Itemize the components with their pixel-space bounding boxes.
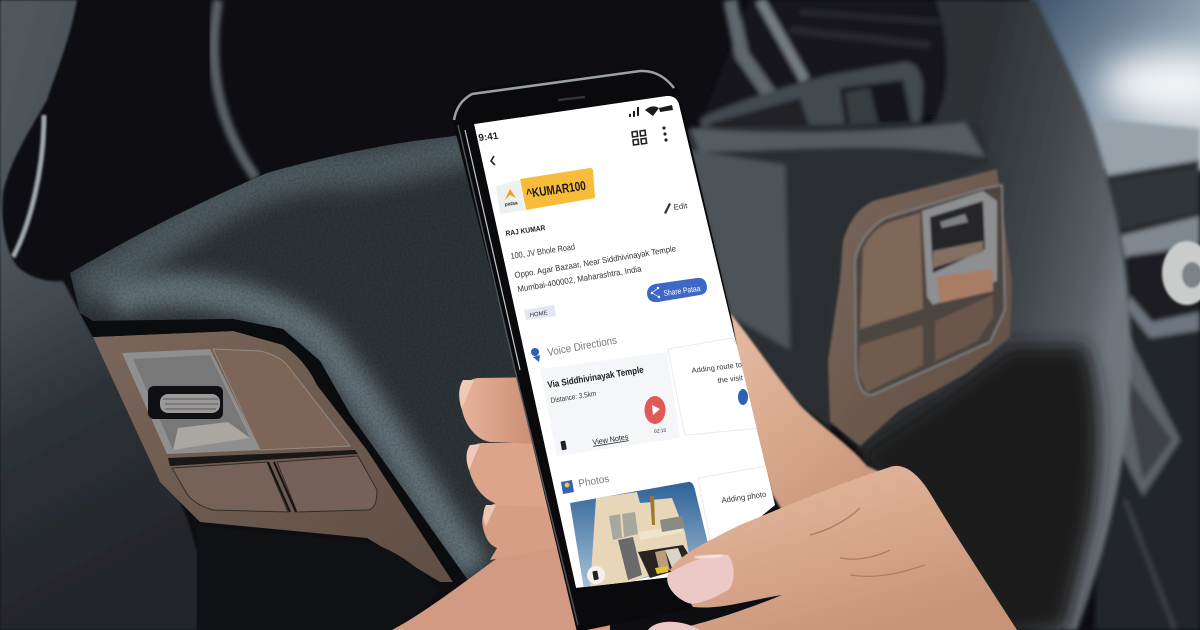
- back chevron: [491, 156, 495, 165]
- house photo: [570, 482, 712, 590]
- lower finger nail at bottom edge: [648, 622, 700, 630]
- steering wheel hub, right of phone: [660, 122, 990, 430]
- second photo card: [698, 466, 775, 540]
- ring finger nail: [483, 505, 496, 526]
- knuckle creases: [810, 508, 925, 576]
- leather hub behind phone: [70, 136, 516, 580]
- middle finger nail: [466, 444, 480, 470]
- lower buttons: [172, 462, 288, 512]
- voice card: Distance: 3.5km: [550, 389, 597, 405]
- windshield and centre console, right: [1030, 0, 1200, 630]
- voice card: View Notes: [592, 432, 629, 447]
- voice directions heading: [531, 338, 617, 362]
- middle finger: [468, 443, 570, 508]
- index finger: [460, 377, 560, 445]
- phone body: [452, 69, 782, 630]
- console knob: [1162, 241, 1200, 305]
- address: 100, JV Bhole Road: [510, 241, 576, 261]
- voice card: [540, 352, 680, 456]
- left palm: [392, 520, 610, 630]
- volume switch frame: [122, 349, 260, 454]
- status icons: [629, 105, 673, 117]
- left spoke: [0, 195, 200, 630]
- plate code: ^KUMAR100: [525, 178, 587, 201]
- voice directions heading: Voice Directions: [547, 334, 618, 359]
- phone screen: app UI: [474, 96, 790, 590]
- share button: Share Pataa: [663, 284, 701, 298]
- time: 9:41: [478, 131, 500, 144]
- address: Oppo. Agar Bazaar, Near Siddhivinayak Temple: [514, 243, 677, 280]
- yellow plate: [520, 168, 595, 210]
- left button panel: [80, 313, 460, 582]
- edit link: [664, 202, 688, 214]
- right back fingers behind phone: [730, 313, 897, 540]
- logo tile: [496, 180, 525, 214]
- address: [510, 241, 677, 294]
- silver ring behind left rim: [13, 115, 44, 257]
- steering wheel rim and right spoke: [700, 0, 1131, 630]
- delete icon: [560, 441, 567, 450]
- HOME tag: HOME: [529, 311, 548, 319]
- play button: [644, 396, 666, 424]
- voice card: 02:15: [654, 428, 667, 435]
- instrument cluster and stalks, top centre: [700, 0, 980, 132]
- right button panel: [828, 169, 1012, 446]
- right panel buttons: [858, 191, 997, 392]
- HOME tag: [524, 305, 556, 320]
- photos heading: Photos: [578, 474, 610, 490]
- share button: [647, 278, 707, 302]
- second voice card: the visit: [717, 373, 744, 385]
- upper right button: [213, 349, 350, 450]
- logo tile: pataa: [504, 200, 519, 208]
- left hand: palm and fingers: [392, 377, 610, 630]
- menu dots: [662, 126, 668, 142]
- dark plastic below left panel: [197, 526, 440, 630]
- address: Mumbai-400002, Maharashtra, India: [517, 263, 642, 294]
- edit link: Edit: [673, 201, 689, 212]
- earpiece: [558, 97, 585, 100]
- name: RAJ KUMAR: [505, 223, 546, 238]
- voice card: Via Siddhivinayak Temple: [547, 365, 645, 391]
- thumb nail: [667, 555, 734, 604]
- photos heading: [561, 476, 610, 494]
- second voice card: Adding route to: [691, 360, 743, 375]
- steering wheel lower right shadow: [857, 345, 1100, 630]
- index finger nail: [459, 380, 474, 408]
- ring finger: [482, 500, 570, 560]
- left steering wheel rim: [0, 0, 77, 260]
- silver instrument ring, left: [214, 0, 256, 178]
- QR icon: [632, 130, 647, 145]
- second photo card: Adding photo: [721, 490, 767, 505]
- thumb and right hand: [667, 466, 1017, 630]
- second voice card: [668, 338, 757, 436]
